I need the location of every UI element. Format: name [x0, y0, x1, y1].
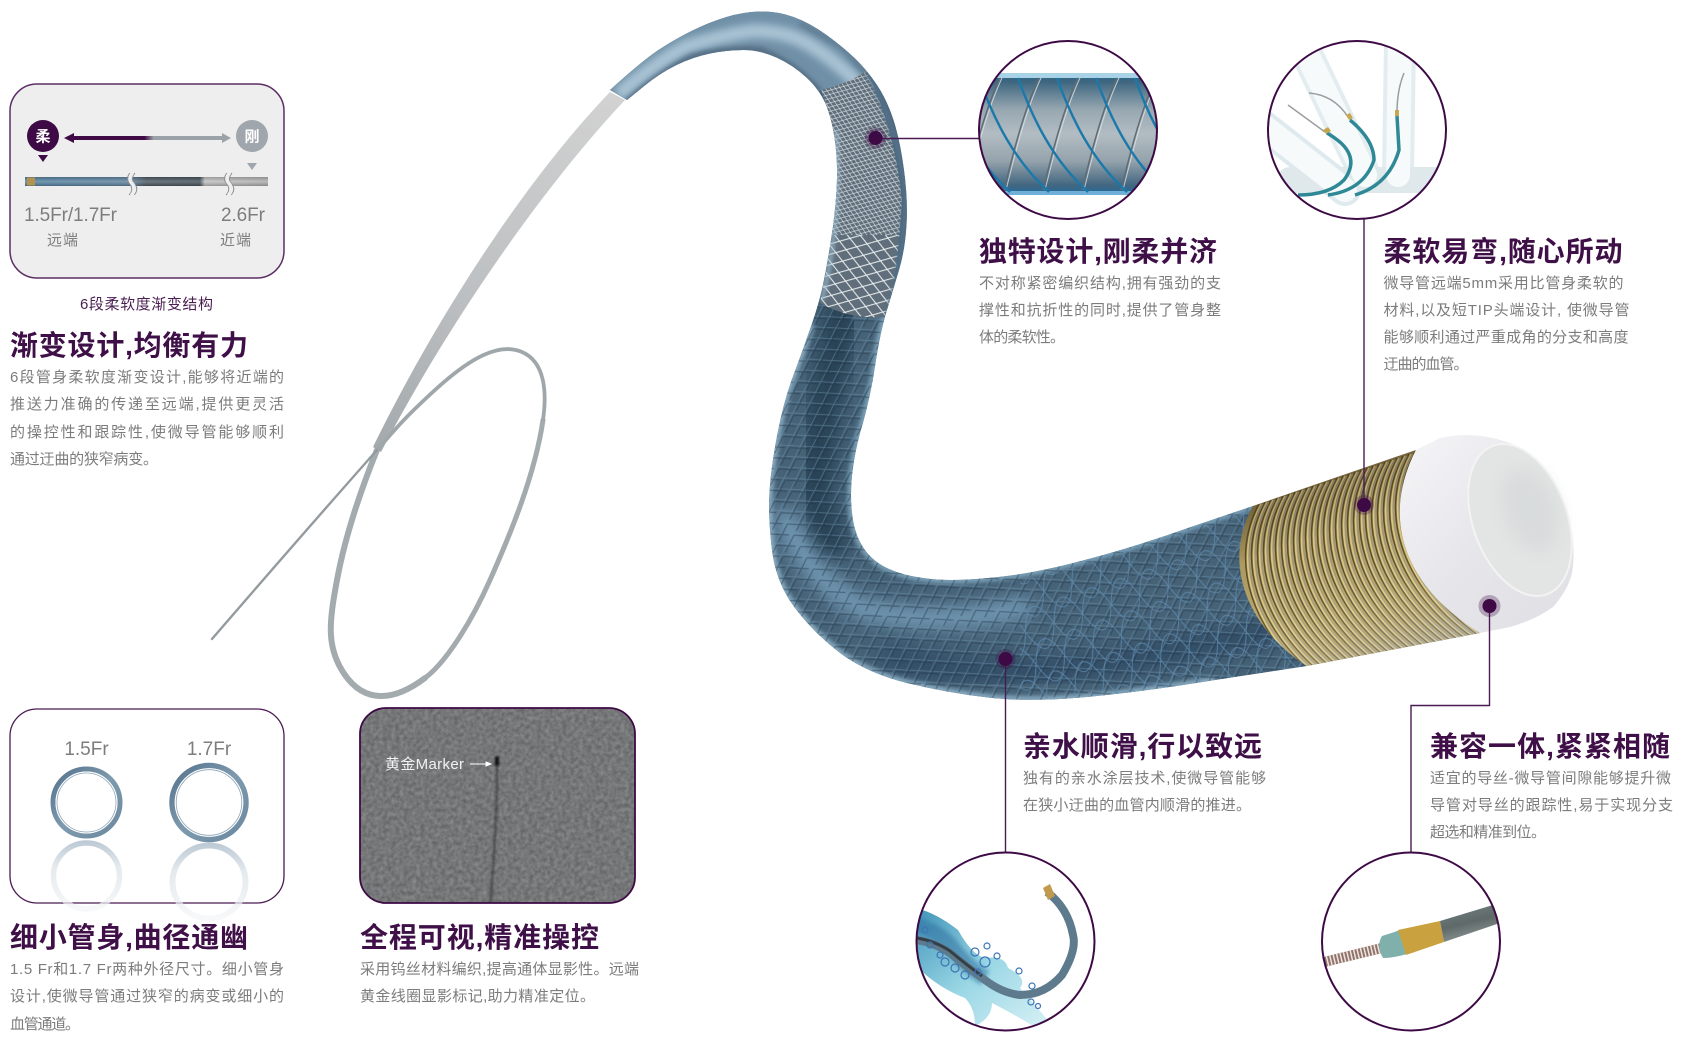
text block: unique design: 撑性和抗折性的同时,提供了管身整	[979, 302, 1221, 319]
text block: compatible: 适宜的导丝-微导管间隙能够提升微	[1430, 770, 1671, 787]
heading: visibility: 全程可视,精准操控	[360, 922, 599, 953]
labels: 1.5Fr/1.7Fr	[24, 205, 118, 226]
text block: visibility: 采用钨丝材料编织,提高通体显影性。远端	[360, 961, 639, 978]
labels: 近端	[220, 232, 251, 249]
top coated section	[610, 12, 866, 100]
catheter body	[600, 0, 1320, 720]
ring reflections	[54, 843, 246, 918]
heading: slim shaft: 细小管身,曲径通幽	[10, 922, 248, 953]
connector lines and anchor dots	[864, 127, 1500, 852]
panel: softness gradient card	[10, 84, 284, 278]
inset: guidewire through tip	[1320, 852, 1506, 1030]
text block: flexible: 迂曲的血管。	[1384, 356, 1468, 373]
panel: x-ray image	[360, 708, 635, 904]
labels	[24, 205, 266, 249]
soft badge	[27, 120, 59, 162]
text block: hydrophilic: 在狭小迂曲的血管内顺滑的推进。	[1023, 797, 1251, 814]
text block: flexible	[1384, 275, 1630, 373]
gold coil marker	[1239, 450, 1480, 666]
braided section	[820, 72, 902, 318]
text block: gradient design: 通过迂曲的狭窄病变。	[10, 450, 158, 468]
catheter bar	[25, 173, 268, 195]
soft badge: 柔	[35, 128, 51, 146]
text block: compatible: 导管对导丝的跟踪性,易于实现分支	[1430, 797, 1673, 814]
heading: flexible: 柔软易弯,随心所动	[1384, 236, 1622, 267]
guide wire ribbon and loop	[212, 92, 625, 696]
text block: slim shaft: 血管通道。	[10, 1016, 80, 1033]
rings	[53, 766, 246, 840]
text block: slim shaft: 设计,使微导管通过狭窄的病变或细小的	[10, 987, 284, 1005]
inset: vessel branches	[1262, 40, 1455, 220]
rigid badge	[236, 120, 268, 170]
arrow	[64, 133, 231, 143]
text block: gradient design: 的操控性和跟踪性,使微导管能够顺利	[10, 424, 284, 441]
inset: hydrophilic water splash	[915, 850, 1097, 1034]
inset: braid close-up	[978, 40, 1158, 220]
text block: slim shaft: 1.5 Fr和1.7 Fr两种外径尺寸。细小管身	[10, 961, 284, 978]
heading: compatible: 兼容一体,紧紧相随	[1430, 731, 1670, 762]
text block: unique design	[979, 275, 1221, 346]
heading: unique design: 独特设计,刚柔并济	[979, 236, 1217, 267]
heading: gradient design: 渐变设计,均衡有力	[10, 330, 248, 361]
rigid badge: 刚	[244, 128, 260, 146]
text block: gradient design	[10, 369, 284, 468]
text block: gradient design: 推送力准确的传递至远端,提供更灵活	[10, 396, 284, 413]
labels: 2.6Fr	[221, 205, 266, 226]
text block: hydrophilic	[1023, 770, 1266, 814]
size labels: 1.7Fr	[187, 739, 232, 760]
text block: unique design: 体的柔软性。	[979, 329, 1065, 346]
text block: compatible	[1430, 770, 1673, 841]
text block: gradient design: 6段管身柔软度渐变设计,能够将近端的	[10, 369, 284, 386]
text block: flexible: 微导管远端5mm采用比管身柔软的	[1384, 275, 1624, 292]
text block: flexible: 材料,以及短TIP头端设计, 使微导管	[1384, 302, 1630, 319]
text block: flexible: 能够顺利通过严重成角的分支和高度	[1384, 329, 1628, 346]
caption: 6段柔软度渐变结构	[80, 296, 213, 313]
heading: hydrophilic: 亲水顺滑,行以致远	[1023, 731, 1262, 762]
size labels: 1.5Fr	[64, 739, 109, 760]
text block: visibility	[360, 961, 639, 1005]
labels: 远端	[47, 232, 78, 249]
text block: compatible: 超选和精准到位。	[1430, 824, 1546, 841]
text block: slim shaft	[10, 961, 284, 1033]
text block: unique design: 不对称紧密编织结构,拥有强劲的支	[979, 275, 1221, 292]
white catheter tip	[1400, 430, 1591, 633]
size labels	[64, 739, 232, 760]
x-ray catheter trace	[490, 756, 499, 904]
text block: hydrophilic: 独有的亲水涂层技术,使微导管能够	[1023, 770, 1266, 787]
text block: visibility: 黄金线圈显影标记,助力精准定位。	[360, 988, 595, 1005]
marker label: 黄金Marker	[385, 756, 464, 773]
panel: sizes card	[10, 709, 284, 918]
